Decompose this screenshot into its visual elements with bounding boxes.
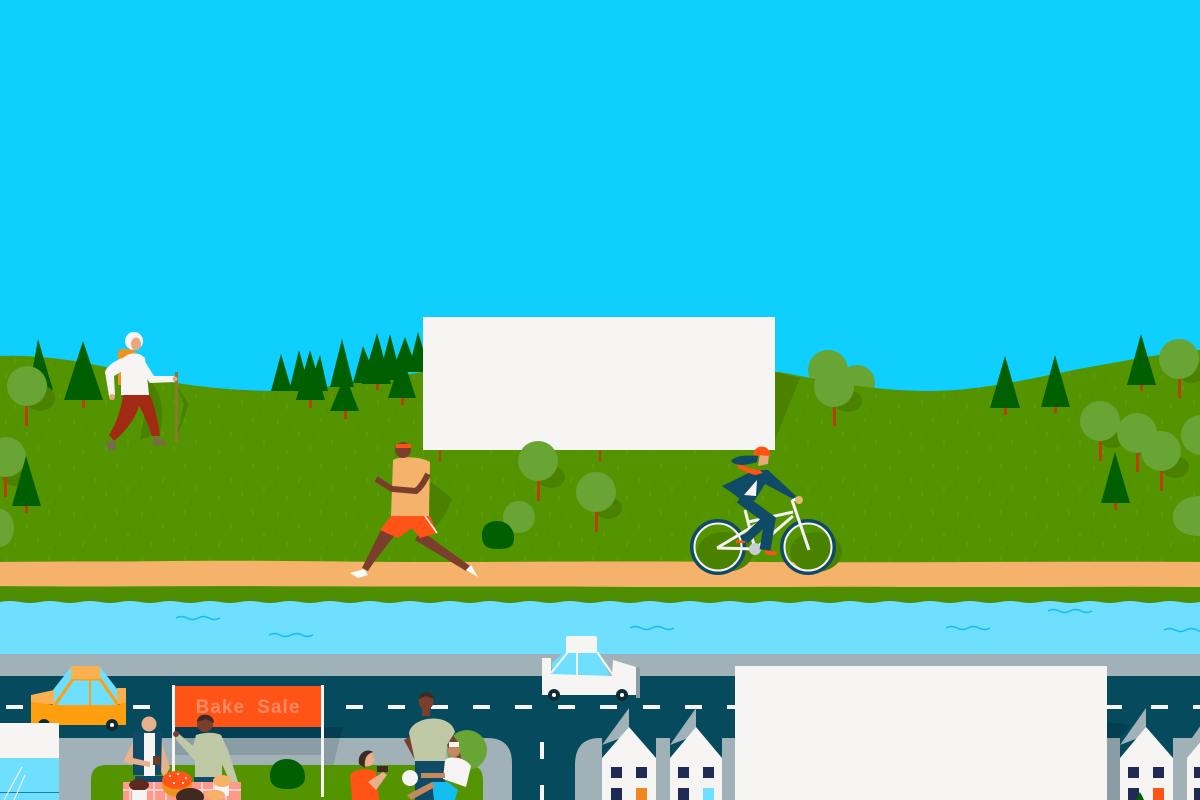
road — [0, 676, 1200, 800]
bake sale banner — [172, 685, 324, 797]
billboard shadow — [775, 372, 800, 440]
hiker — [105, 332, 189, 451]
yellow car — [31, 666, 126, 731]
river — [0, 601, 1200, 654]
hill tree line — [29, 332, 1156, 408]
woman in orange shirt — [350, 750, 388, 800]
lower blank billboard — [735, 666, 1107, 800]
picnic table with baked goods — [123, 771, 241, 800]
grassy hill — [0, 350, 1200, 600]
road markings — [6, 705, 1200, 800]
hill trees, left — [0, 366, 55, 547]
bush on lawn — [270, 759, 305, 789]
sky — [0, 0, 1200, 420]
white vehicle at left — [0, 723, 59, 800]
front pine group — [296, 350, 416, 419]
white car — [542, 636, 640, 701]
tree behind family — [447, 730, 487, 770]
bake sale banner: Bake Sale — [196, 697, 300, 718]
cyclist — [692, 447, 842, 573]
hill trees, right — [814, 339, 1200, 536]
child and ball — [402, 742, 471, 800]
pavement strip — [0, 654, 1200, 676]
bake sale banner shadow — [175, 727, 343, 795]
man with coffee — [123, 716, 170, 782]
middle trees and bushes — [482, 441, 622, 549]
upper blank billboard — [423, 317, 775, 462]
house 1 — [602, 727, 656, 800]
round trees behind the hill — [808, 350, 875, 401]
right pavement and house backdrops — [575, 708, 1200, 800]
woman in sage top — [173, 715, 238, 784]
left pavement block — [59, 738, 512, 800]
runner — [350, 442, 478, 578]
house 3 — [1120, 727, 1173, 800]
house 2 — [670, 727, 722, 800]
left lawn — [91, 765, 483, 800]
house 4 — [1187, 727, 1200, 800]
standing man — [404, 692, 463, 800]
sand path — [0, 561, 1200, 587]
lower grass bank — [0, 587, 1200, 603]
river ripples — [176, 610, 1200, 636]
